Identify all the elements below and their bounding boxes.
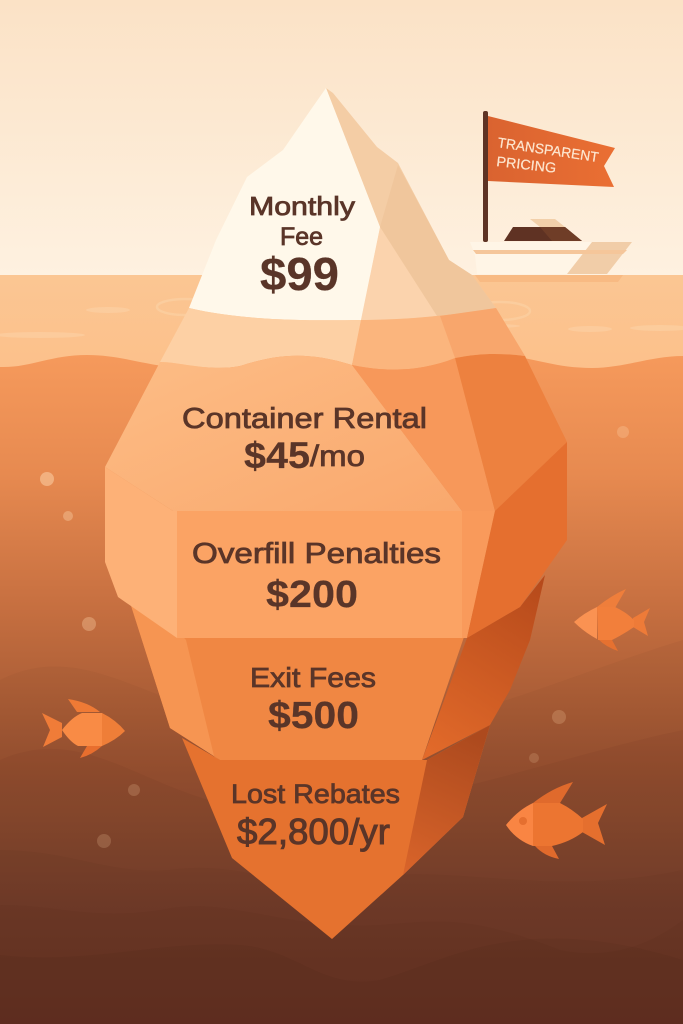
flag text: TRANSPARENT (497, 134, 600, 165)
fish: upper right (574, 589, 650, 651)
bubbles (40, 426, 629, 848)
label: container rental: Container Rental (182, 403, 427, 435)
fish: lower right (506, 782, 607, 859)
ripple rings (157, 299, 530, 320)
label: monthly fee (249, 191, 355, 300)
water depth waves (0, 640, 683, 1024)
label: container rental: $45 (244, 435, 310, 476)
label: overfill penalties: Overfill Penalties (192, 538, 441, 570)
label: container rental (182, 403, 427, 476)
panel: lost rebates layer (182, 725, 490, 939)
flag pole (483, 111, 488, 242)
tip shaded side (326, 88, 496, 320)
label: monthly fee: Monthly (249, 191, 355, 221)
label: lost rebates: $2,800/yr (237, 811, 390, 852)
panel: exit fees layer (127, 575, 545, 760)
water surface band (0, 275, 683, 375)
panel: overfill penalties layer (105, 442, 567, 638)
exit dark side (422, 575, 545, 760)
panel: boat and flag (470, 111, 632, 282)
sky background (0, 0, 683, 276)
label: monthly fee: Fee (280, 223, 323, 251)
label: lost rebates (231, 779, 400, 852)
label: exit fees: Exit Fees (250, 662, 376, 693)
label: container rental: /mo (310, 440, 365, 473)
boat hull (470, 242, 632, 274)
panel: iceberg tip above water (189, 88, 496, 320)
panel: container rental layer (105, 354, 567, 511)
label: exit fees (250, 662, 376, 737)
label: overfill penalties (192, 538, 441, 616)
fish: left (42, 699, 125, 758)
panel: translucent waterline band (160, 308, 525, 370)
boat reflection (475, 275, 623, 282)
boat cabin (530, 219, 565, 227)
exit lit side (127, 593, 220, 760)
label: overfill penalties: $200 (266, 574, 358, 616)
flag banner (488, 116, 615, 187)
label: exit fees: $500 (268, 695, 359, 737)
flag text: PRICING (496, 153, 557, 176)
deep water (0, 353, 683, 1024)
surface ripples (0, 307, 683, 345)
label: lost rebates: Lost Rebates (231, 779, 400, 809)
boat stripe (473, 250, 627, 254)
label: monthly fee: $99 (260, 248, 339, 300)
tip lit side (189, 88, 380, 320)
